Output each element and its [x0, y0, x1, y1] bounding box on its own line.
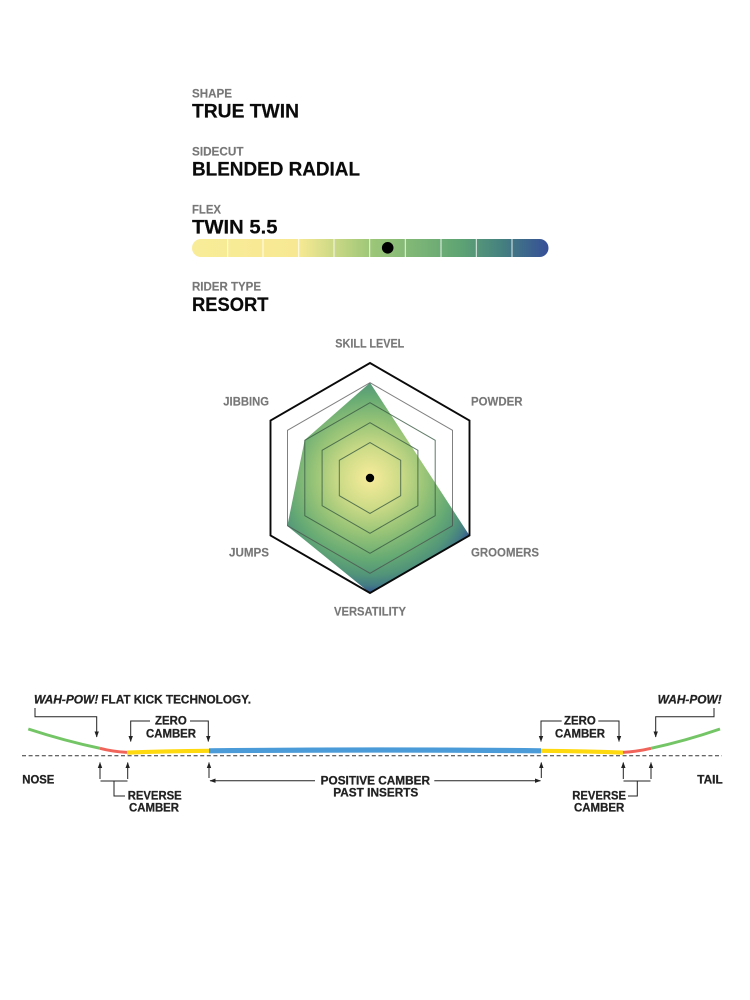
callout: tail zero camber: CAMBER	[555, 728, 606, 740]
heading: flat kick technology	[34, 694, 251, 706]
callout: tail reverse camber	[572, 762, 651, 815]
label: tail: TAIL	[697, 774, 723, 786]
radar axis labels: POWDER	[471, 396, 523, 408]
spec: flex: TWIN 5.5	[192, 216, 278, 238]
callout: tail reverse camber: CAMBER	[574, 803, 625, 815]
heading: flat kick technology: WAH-POW!	[34, 694, 98, 706]
callout: tail zero camber: ZERO	[564, 716, 596, 728]
flex gradient bar	[192, 239, 548, 257]
leader arrow: tail wah-pow	[656, 708, 714, 737]
label: nose: NOSE	[22, 774, 55, 786]
radar chart	[223, 338, 539, 618]
radar axis labels: GROOMERS	[471, 548, 539, 560]
spec: shape	[192, 88, 299, 123]
radar grid	[270, 363, 470, 593]
callout: nose reverse camber	[100, 762, 182, 815]
spec: sidecut	[192, 146, 360, 181]
spec: rider type: RESORT	[192, 294, 269, 316]
callout: nose zero camber	[131, 716, 208, 742]
spec: rider type	[192, 282, 269, 316]
radar axis labels: SKILL LEVEL	[335, 338, 404, 350]
callout: tail zero camber	[541, 716, 619, 742]
callout: nose reverse camber: CAMBER	[129, 803, 180, 815]
spec: shape: SHAPE	[192, 88, 232, 100]
radar axis labels	[223, 338, 539, 618]
callout: nose zero camber: CAMBER	[146, 728, 197, 740]
board profile curve	[28, 729, 720, 753]
callout: tail reverse camber: REVERSE	[572, 790, 626, 802]
radar axis labels: JUMPS	[229, 548, 269, 560]
callout: positive camber past inserts: PAST INSERTS	[333, 788, 419, 800]
radar axis labels: VERSATILITY	[334, 606, 406, 618]
spec: flex: FLEX	[192, 204, 221, 216]
spec: sidecut: BLENDED RADIAL	[192, 159, 360, 181]
callout: positive camber past inserts: POSITIVE CAMBER	[321, 775, 431, 787]
callout: wah-pow right: WAH-POW!	[658, 694, 722, 706]
radar center dot	[366, 474, 374, 482]
callout: nose reverse camber: REVERSE	[128, 790, 182, 802]
spec: flex	[192, 204, 548, 257]
radar data polygon	[287, 383, 470, 593]
callout: positive camber past inserts	[209, 762, 541, 800]
callout: nose zero camber: ZERO	[155, 716, 187, 728]
spec: sidecut: SIDECUT	[192, 146, 244, 158]
baseline dashed	[22, 755, 722, 757]
spec: rider type: RIDER TYPE	[192, 282, 261, 294]
radar axis labels: JIBBING	[223, 396, 269, 408]
flex marker dot	[382, 242, 394, 254]
heading: flat kick technology: FLAT KICK TECHNOLOGY.	[101, 694, 251, 706]
camber profile diagram	[22, 694, 723, 815]
leader arrow: nose wah-pow	[35, 708, 97, 737]
spec: shape: TRUE TWIN	[192, 101, 299, 123]
